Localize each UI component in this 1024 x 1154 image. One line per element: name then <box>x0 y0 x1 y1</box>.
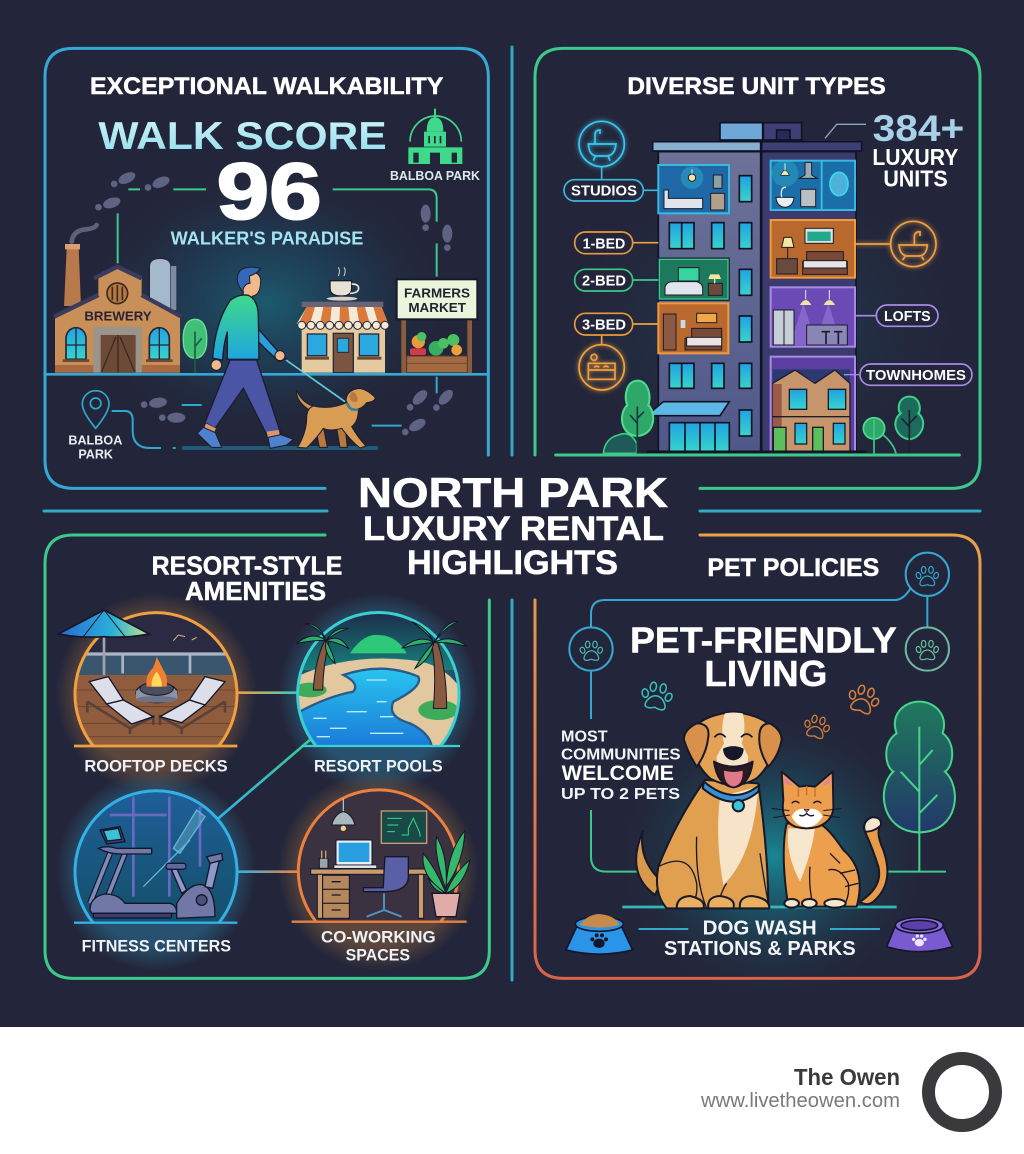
figure: dog on leash <box>297 388 375 448</box>
label: co-working spaces: SPACES <box>346 946 410 965</box>
footer brand text: www.livetheowen.com <box>700 1090 900 1112</box>
unit: kitchen and bath <box>771 160 855 210</box>
label: 2-bed <box>575 269 658 291</box>
heading: pet-friendly living: LIVING <box>704 653 827 694</box>
figure: cat <box>772 772 887 908</box>
panel: resort-style amenities <box>45 535 489 978</box>
footer brand text <box>700 1064 900 1112</box>
label: balboa park top: BALBOA PARK <box>390 169 481 183</box>
footprints <box>94 170 456 438</box>
text: most communities welcome up to 2 pets: MOST <box>561 729 608 746</box>
leash <box>286 360 345 402</box>
figure: dog <box>636 712 782 908</box>
title: north park luxury rental highlights: NORTH PARK <box>358 469 668 516</box>
route lines and paw circles <box>569 553 949 719</box>
walking shadow <box>182 446 378 450</box>
icon: farmers market stand <box>397 279 477 373</box>
unit: townhomes <box>771 357 855 452</box>
label: 3-bed <box>575 313 658 345</box>
stat: 384+ luxury units: LUXURY <box>872 144 959 170</box>
icon: balboa park building <box>408 109 462 164</box>
icon: hot tub orange <box>579 345 624 390</box>
route and tree <box>591 702 955 872</box>
unit: loft <box>771 287 855 347</box>
heading: pet-friendly living: PET-FRIENDLY <box>630 619 897 660</box>
icon: small tree <box>183 319 207 373</box>
title: north park luxury rental highlights: HIGHLIGHTS <box>407 544 618 582</box>
icon: coffee shop <box>297 267 389 373</box>
amenity: resort pools <box>278 593 478 793</box>
label: 1-bed <box>575 232 658 254</box>
icon: map pin and route <box>82 391 402 448</box>
label: balboa park pin: PARK <box>78 448 114 462</box>
text: most communities welcome up to 2 pets: COMMUNITIES <box>561 746 681 763</box>
text: dog wash stations and parks: STATIONS & PARKS <box>664 937 856 960</box>
label: townhomes: TOWNHOMES <box>866 368 966 384</box>
trees and ground <box>556 381 959 455</box>
panel: pet policies <box>535 535 980 1003</box>
amenity: fitness centers <box>56 771 256 971</box>
icon: farmers market stand: MARKET <box>408 300 466 315</box>
heading: resort-style amenities <box>152 550 342 606</box>
decorative paws <box>639 680 883 740</box>
text: dog wash stations and parks <box>664 916 856 960</box>
footer brand text: The Owen <box>794 1064 900 1090</box>
panel: exceptional walkability <box>45 48 488 488</box>
text: most communities welcome up to 2 pets: UP TO 2 PETS <box>561 786 680 803</box>
footer band <box>0 1027 1024 1154</box>
label lines <box>639 926 880 932</box>
walk score label: WALK SCORE <box>98 114 387 158</box>
connector lines <box>218 693 312 872</box>
title: north park luxury rental highlights: LUXURY RENTAL <box>363 510 664 548</box>
unit: 2-bed <box>658 258 729 300</box>
label: studios: STUDIOS <box>571 184 637 200</box>
label: fitness centers: FITNESS CENTERS <box>82 937 231 956</box>
heading: resort-style amenities: AMENITIES <box>185 576 326 606</box>
stat: 384+ luxury units: UNITS <box>883 166 948 192</box>
icon: brewery <box>54 225 182 373</box>
label: 3-bed: 3-BED <box>582 318 626 334</box>
ground line <box>45 370 488 378</box>
heading: exceptional walkability: EXCEPTIONAL WALKABILITY <box>90 73 443 100</box>
central divider lines <box>44 47 980 980</box>
icon: bathtub cyan <box>579 121 624 167</box>
icon: blue food bowl <box>566 914 633 954</box>
figure: apartment building <box>647 123 862 452</box>
label: co-working spaces: CO-WORKING <box>321 928 436 947</box>
text: most communities welcome up to 2 pets: WELCOME <box>562 761 674 785</box>
label: lofts <box>855 305 938 326</box>
icon: bathtub orange <box>855 221 936 267</box>
label: rooftop decks: ROOFTOP DECKS <box>84 757 228 776</box>
stat: 384+ luxury units: 384+ <box>873 108 964 149</box>
label: resort pools: RESORT POOLS <box>314 757 443 776</box>
label: 2-bed: 2-BED <box>582 274 626 290</box>
amenity: rooftop decks <box>56 593 256 793</box>
label: lofts: LOFTS <box>884 309 931 325</box>
ground line <box>622 903 897 911</box>
title: north park luxury rental highlights <box>358 469 668 582</box>
text: most communities welcome up to 2 pets <box>561 729 681 803</box>
walker's paradise label: WALKER'S PARADISE <box>171 227 363 248</box>
amenity: co-working spaces <box>278 771 478 971</box>
label: balboa park pin <box>68 433 122 462</box>
unit: 1-bed orange <box>771 220 855 278</box>
label: townhomes <box>844 364 972 385</box>
icon: farmers market stand: FARMERS <box>404 285 470 300</box>
green route lines <box>118 189 437 277</box>
icon: purple water bowl <box>887 917 953 952</box>
footer logo ring <box>928 1058 996 1126</box>
heading: resort-style amenities: RESORT-STYLE <box>152 550 342 580</box>
heading: diverse unit types: DIVERSE UNIT TYPES <box>627 73 886 100</box>
unit: 3-bed <box>658 303 728 353</box>
unit: studio <box>658 165 729 213</box>
icon: brewery: BREWERY <box>84 309 152 324</box>
label: 1-bed: 1-BED <box>583 236 625 252</box>
label: studios <box>564 167 658 201</box>
heading: pet policies: PET POLICIES <box>707 554 879 582</box>
heading: pet-friendly living <box>630 619 897 694</box>
text: dog wash stations and parks: DOG WASH <box>703 916 817 939</box>
figure: person walking <box>197 267 293 448</box>
panel: diverse unit types <box>535 48 980 488</box>
walk score number: 96 <box>217 146 322 235</box>
stat: 384+ luxury units <box>825 108 964 192</box>
label: co-working spaces <box>321 928 436 965</box>
label: balboa park pin: BALBOA <box>68 433 122 447</box>
